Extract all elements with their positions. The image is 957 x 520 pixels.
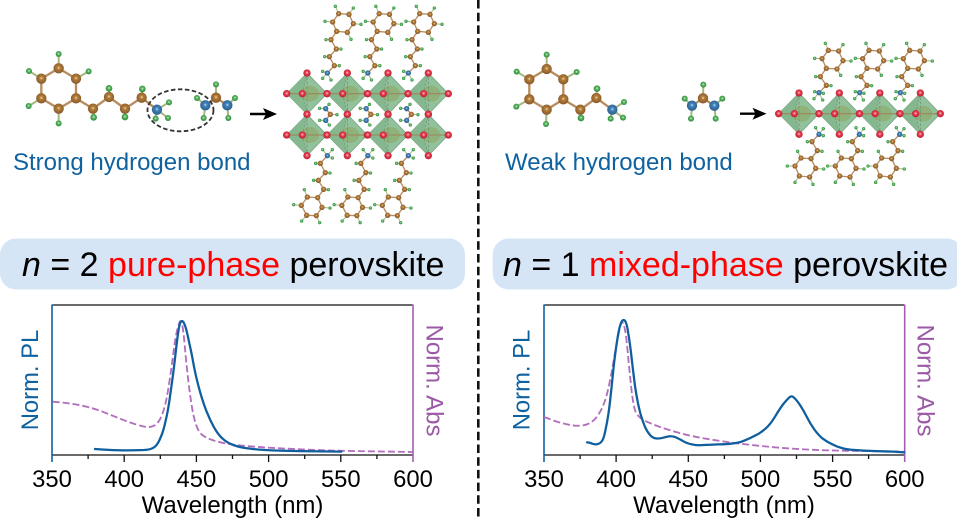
dashed ellipse: hydrogen bond highlight	[148, 89, 214, 131]
curve: photoluminescence	[587, 320, 904, 452]
y axis title: PL: Norm. PL	[17, 330, 44, 430]
crystal structure: n = 1 perovskite	[775, 42, 944, 186]
crystal structure: n = 2 perovskite	[283, 5, 452, 224]
tick labels: 400	[104, 466, 144, 493]
y axis title: Abs: Norm. Abs	[912, 324, 939, 437]
tick labels: 550	[321, 466, 361, 493]
x axis title: Wavelength (nm)	[142, 492, 323, 519]
x axis title: Wavelength (nm)	[633, 492, 815, 519]
axes and ticks	[544, 304, 905, 462]
banner: n = 2 pure-phase perovskite: n = 2 pure-phase perovskite	[22, 246, 444, 284]
tick labels: 350	[32, 466, 72, 493]
tick labels: 600	[393, 466, 433, 493]
tick labels: 450	[177, 466, 216, 493]
y axis title: Abs: Norm. Abs	[421, 324, 448, 437]
tick labels: 550	[813, 466, 852, 493]
axes and ticks	[52, 304, 413, 462]
tick labels: 350	[524, 466, 564, 493]
divider: dashed vertical line	[477, 0, 480, 520]
molecule: formamidinium cation, right	[682, 82, 725, 122]
tick labels	[32, 466, 433, 493]
arrow: left structure	[250, 108, 277, 120]
y axis title: PL: Norm. PL	[508, 330, 535, 430]
tick labels	[524, 466, 925, 493]
chart: right spectrum	[508, 304, 939, 519]
chart: left spectrum	[17, 304, 448, 519]
tick labels: 500	[741, 466, 780, 493]
label: weak hydrogen bond: Weak hydrogen bond	[505, 149, 733, 176]
label: strong hydrogen bond: Strong hydrogen bond	[13, 149, 251, 176]
molecule: long-chain organic spacer cation, left	[26, 51, 172, 126]
tick labels: 400	[596, 466, 636, 493]
banner: n = 2 pure-phase perovskite	[0, 238, 465, 290]
curve: absorbance	[544, 322, 903, 452]
tick labels: 450	[668, 466, 708, 493]
arrow: right structure	[740, 108, 766, 120]
curve: photoluminescence	[95, 321, 341, 452]
curve: absorbance	[53, 321, 413, 452]
tick labels: 500	[249, 466, 288, 493]
banner: n = 1 mixed-phase perovskite: n = 1 mixed-phase perovskite	[503, 246, 948, 284]
molecule: short-chain organic spacer cation, right	[513, 52, 627, 127]
tick labels: 600	[885, 466, 925, 493]
molecule: formamidinium cation, left	[194, 81, 238, 121]
